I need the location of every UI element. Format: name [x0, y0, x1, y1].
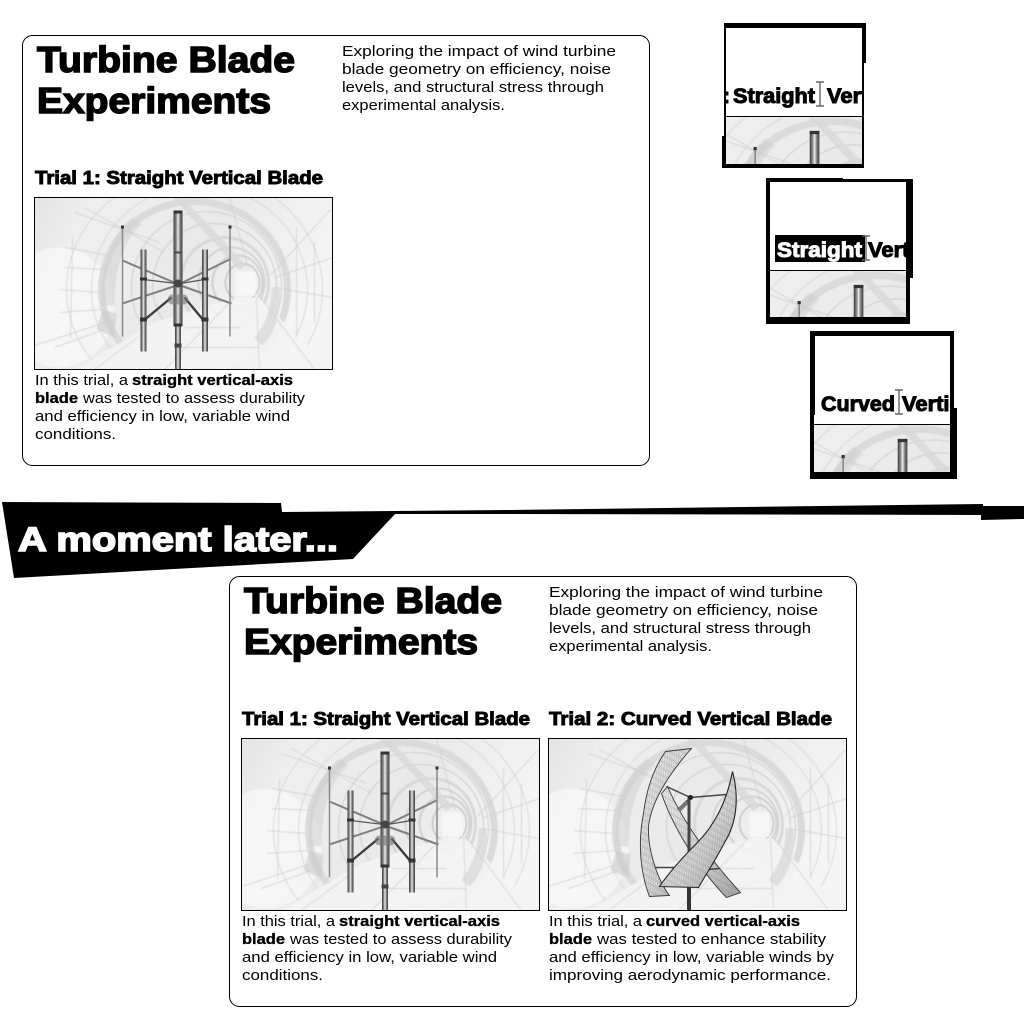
zoom frame 2: Straight selected: [766, 178, 913, 324]
caption: trial 2: [549, 913, 835, 984]
intro text: levels, and structural stress through: [342, 79, 604, 96]
caption: trial 2: curved vertical-axis: [646, 913, 800, 930]
caption: trial 1: and efficiency in low, variable wind: [35, 408, 290, 425]
zoom frame 3: cursor beside Curved: Vertical: [902, 393, 980, 416]
caption: trial 1: blade: [242, 931, 285, 948]
caption: trial 1: and efficiency in low, variable wind: [242, 949, 497, 966]
intro text: experimental analysis.: [549, 638, 712, 655]
zoom frame 1: cursor beside Straight: [722, 23, 866, 168]
heading: trial 1: Trial 1: Straight Vertical Blade: [35, 168, 323, 188]
banner: a moment later: A moment later...: [18, 521, 338, 559]
caption: trial 1: In this trial, a: [35, 372, 129, 389]
intro text: [342, 43, 616, 114]
caption: trial 2: was tested to enhance stability: [596, 931, 827, 948]
zoom frame 2: Straight selected: Straight: [777, 239, 862, 262]
icon: text cursor: [895, 390, 903, 414]
caption: trial 1: In this trial, a: [242, 913, 336, 930]
zoom frame 1: cursor beside Straight: Straight: [733, 85, 815, 108]
caption: trial 2: blade: [549, 931, 592, 948]
heading: trial 2: Trial 2: Curved Vertical Blade: [549, 709, 832, 729]
caption: trial 2: In this trial, a: [549, 913, 643, 930]
zoom frame 3: cursor beside Curved: [810, 331, 957, 479]
intro text: experimental analysis.: [342, 97, 505, 114]
zoom frame 1: cursor beside Straight: Vertical: [827, 85, 905, 108]
image: straight vertical blade turbine in wind tunnel: [4, 172, 332, 408]
caption: trial 1: [242, 913, 513, 984]
intro text: levels, and structural stress through: [549, 620, 811, 637]
caption: trial 1: straight vertical-axis: [339, 913, 500, 930]
title: Turbine Blade: [37, 39, 295, 80]
title: Experiments: [37, 80, 271, 121]
caption: trial 1: conditions.: [35, 426, 116, 443]
caption: trial 1: straight vertical-axis: [132, 372, 293, 389]
caption: trial 1: was tested to assess durability: [289, 931, 513, 948]
intro text: blade geometry on efficiency, noise: [549, 602, 818, 619]
title: Turbine Blade: [244, 580, 502, 621]
zoom frame 1: cursor beside Straight: :: [723, 85, 730, 108]
caption: trial 1: was tested to assess durability: [82, 390, 306, 407]
zoom frame 2: Straight selected: Vertical: [868, 239, 946, 262]
intro text: Exploring the impact of wind turbine: [342, 43, 616, 60]
heading: trial 1: Trial 1: Straight Vertical Blade: [242, 709, 530, 729]
caption: trial 1: [35, 372, 306, 443]
panel: turbine blade experiments, after: [212, 576, 856, 1006]
intro text: Exploring the impact of wind turbine: [549, 584, 823, 601]
banner: a moment later: [2, 502, 1024, 578]
zoom frame 3: cursor beside Curved: Curved: [821, 393, 895, 416]
title: [37, 39, 295, 121]
icon: text cursor: [862, 236, 870, 260]
icon: text cursor: [816, 82, 824, 106]
caption: trial 1: conditions.: [242, 967, 323, 984]
caption: trial 1: blade: [35, 390, 78, 407]
image: straight vertical blade turbine in wind tunnel: [212, 712, 540, 948]
intro text: blade geometry on efficiency, noise: [342, 61, 611, 78]
image: curved vertical blade turbine in wind tunnel: [518, 712, 846, 948]
title: [244, 580, 502, 662]
caption: trial 2: and efficiency in low, variable winds by: [549, 949, 835, 966]
title: Experiments: [244, 621, 478, 662]
panel: turbine blade experiments, before: [4, 36, 650, 466]
caption: trial 2: improving aerodynamic performance.: [549, 967, 831, 984]
intro text: [549, 584, 823, 655]
